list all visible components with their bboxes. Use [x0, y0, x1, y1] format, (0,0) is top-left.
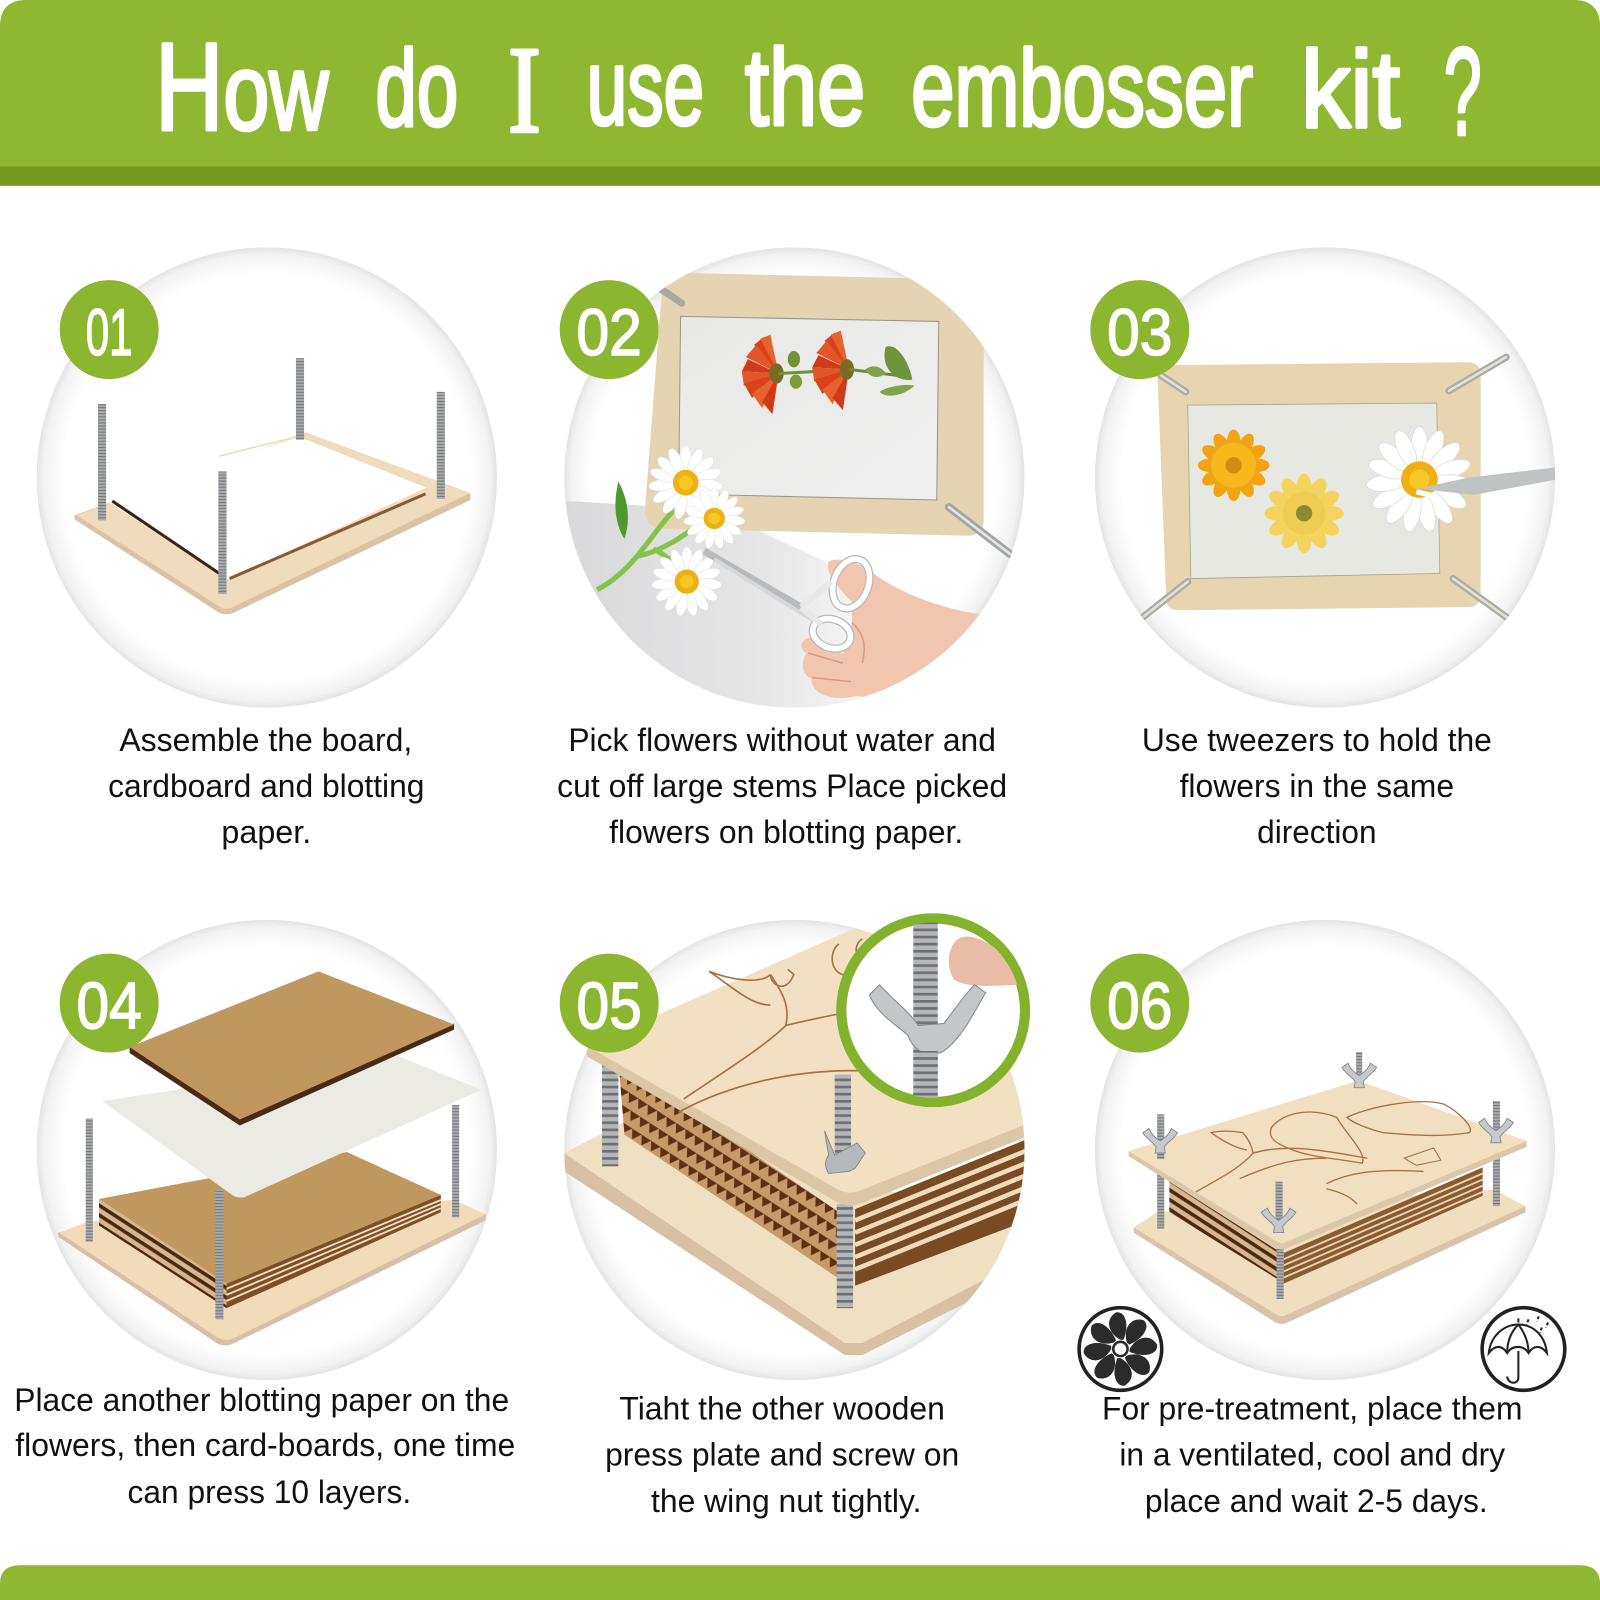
caption 05: Tiaht the other wooden	[619, 1389, 945, 1426]
caption 02	[557, 721, 1007, 850]
step 02 photo: board, flowers, scissors and hand	[566, 273, 1012, 707]
badge 06	[1090, 954, 1189, 1053]
step 04 circle	[37, 920, 497, 1380]
caption 02: Pick flowers without water and	[568, 721, 996, 758]
inset: wing nut close-up	[841, 913, 1025, 1102]
badge 02	[560, 280, 659, 379]
caption 02: flowers on blotting paper.	[609, 813, 963, 850]
footer band	[0, 1565, 1600, 1600]
badge 03	[1090, 280, 1189, 379]
title: ?	[1444, 23, 1482, 162]
caption 01	[108, 721, 424, 850]
panel: step 04	[14, 920, 515, 1510]
step 01 circle	[37, 247, 497, 708]
caption 06: place and wait 2-5 days.	[1145, 1482, 1488, 1519]
badge 01	[60, 280, 159, 379]
panel: step 01	[37, 247, 497, 850]
title: embosser	[911, 28, 1253, 149]
caption 03: flowers in the same	[1180, 767, 1454, 804]
badge 04: 04	[77, 970, 142, 1044]
title: I	[508, 21, 541, 159]
panel: step 03	[1090, 247, 1556, 850]
step 03 photo: board, paper, flowers and tweezers	[1144, 357, 1556, 618]
step 04 illustration: layered cardboard and blotting paper	[58, 971, 486, 1345]
step 01 illustration: base board with screws	[74, 358, 470, 614]
step 02 circle	[564, 247, 1024, 708]
step 06 circle	[1095, 920, 1555, 1380]
caption 06	[1102, 1389, 1522, 1519]
caption 04	[14, 1381, 515, 1510]
caption 05: press plate and screw on	[605, 1435, 959, 1472]
caption 04: flowers, then card-boards, one time	[15, 1426, 515, 1463]
caption 03: Use tweezers to hold the	[1142, 721, 1492, 758]
title: use	[587, 26, 704, 147]
caption 03: direction	[1257, 813, 1377, 850]
title: do	[376, 28, 458, 149]
header banner	[0, 0, 1600, 186]
caption 02: cut off large stems Place picked	[557, 767, 1007, 804]
caption 03	[1142, 721, 1492, 850]
title	[155, 18, 1482, 162]
badge 05	[560, 954, 659, 1053]
caption 06: in a ventilated, cool and dry	[1119, 1435, 1506, 1472]
title: kit	[1301, 29, 1400, 150]
panel: step 05	[560, 913, 1082, 1519]
title: the	[745, 26, 865, 147]
caption 06: For pre-treatment, place them	[1102, 1389, 1522, 1426]
caption 05	[605, 1389, 959, 1519]
caption 01: Assemble the board,	[119, 721, 412, 758]
title: How	[155, 18, 329, 157]
badge 05: 05	[577, 970, 642, 1044]
caption 05: the wing nut tightly.	[651, 1482, 921, 1519]
step 06 illustration: assembled press	[1129, 1052, 1527, 1324]
icon: umbrella with rain	[1482, 1308, 1565, 1390]
badge 02: 02	[577, 296, 642, 370]
caption 01: cardboard and blotting	[108, 767, 424, 804]
badge 06: 06	[1107, 970, 1172, 1044]
badge 04	[60, 954, 159, 1053]
caption 04: Place another blotting paper on the	[14, 1381, 509, 1418]
badge 03: 03	[1107, 296, 1172, 370]
step 03 circle	[1095, 247, 1555, 708]
icon: ventilation fan	[1079, 1308, 1162, 1390]
panel: step 06	[1079, 920, 1565, 1519]
step 05 circle	[564, 920, 1024, 1380]
badge 01: 01	[86, 296, 133, 370]
caption 01: paper.	[221, 813, 311, 850]
caption 04: can press 10 layers.	[128, 1473, 411, 1510]
panel: step 02	[551, 247, 1031, 850]
step 05 illustration: close-up press with wing nut	[564, 928, 1024, 1356]
